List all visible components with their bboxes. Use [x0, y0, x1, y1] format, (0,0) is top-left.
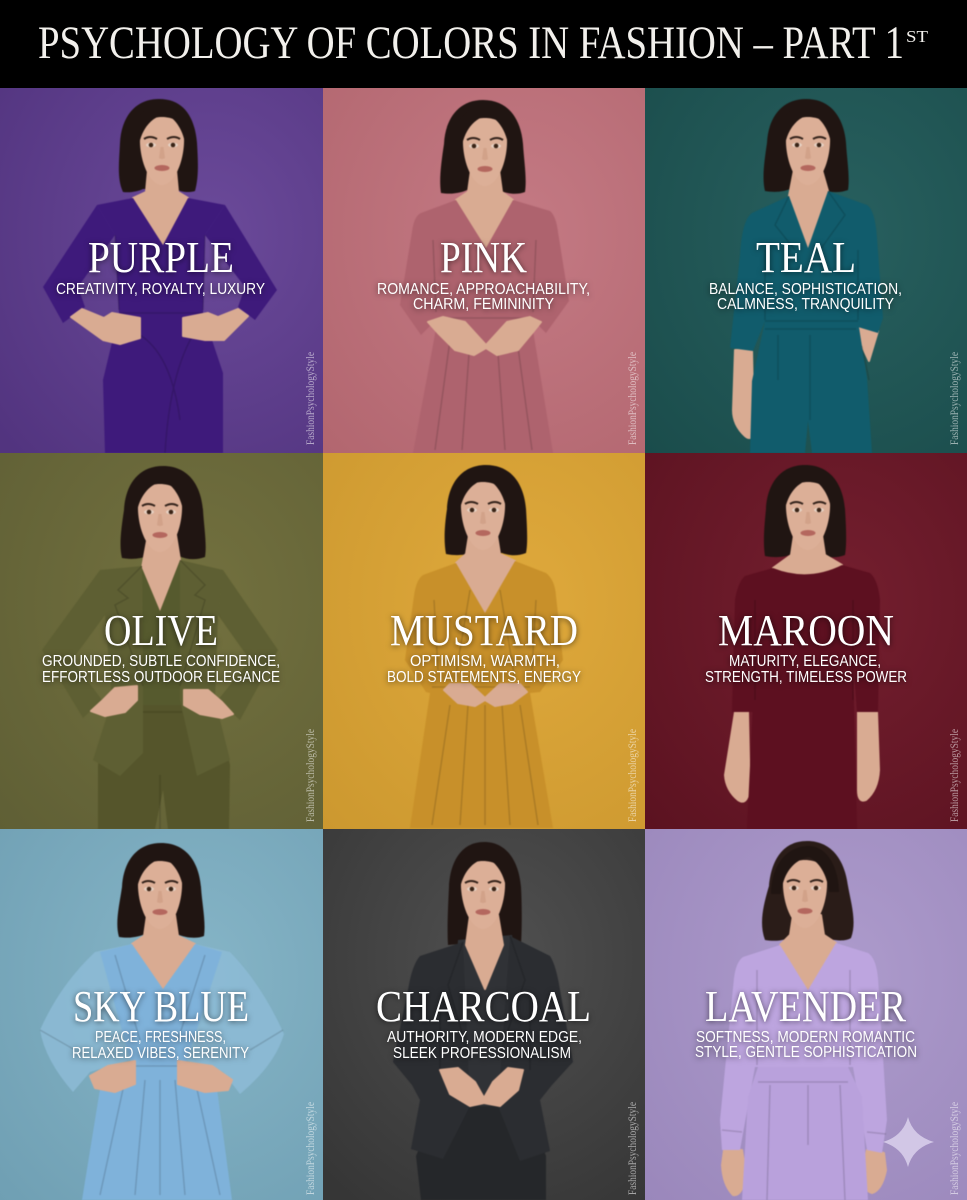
- figure: charcoal suit: [393, 842, 573, 1200]
- figure: purple dress: [43, 99, 277, 453]
- label: pink: ROMANCE, APPROACHABILITY,: [377, 281, 590, 298]
- watermark: FashionPsychologyStyle: [949, 1102, 961, 1195]
- label: sky blue: PEACE, FRESHNESS,: [95, 1029, 226, 1046]
- label: sky blue: [72, 982, 249, 1062]
- label: charcoal: CHARCOAL: [376, 982, 591, 1031]
- label: lavender: SOFTNESS, MODERN ROMANTIC: [696, 1029, 915, 1046]
- figure: lavender blouse and trousers: [720, 841, 887, 1200]
- watermark: FashionPsychologyStyle: [627, 352, 639, 445]
- label: olive: OLIVE: [104, 606, 218, 655]
- figure: sky blue dress: [40, 843, 284, 1200]
- label: sky blue: RELAXED VIBES, SERENITY: [72, 1045, 249, 1062]
- label: mustard: [387, 606, 581, 686]
- panel: pink: [323, 88, 645, 453]
- label: maroon: STRENGTH, TIMELESS POWER: [705, 669, 907, 686]
- watermark: FashionPsychologyStyle: [305, 1102, 317, 1195]
- title superscript: ST: [906, 27, 929, 46]
- label: olive: GROUNDED, SUBTLE CONFIDENCE,: [42, 653, 280, 670]
- panel: olive: [0, 453, 323, 829]
- label: maroon: MAROON: [718, 606, 894, 655]
- panel: lavender: [645, 829, 967, 1200]
- label: olive: EFFORTLESS OUTDOOR ELEGANCE: [42, 669, 280, 686]
- panel: maroon: [645, 453, 967, 829]
- label: mustard: BOLD STATEMENTS, ENERGY: [387, 669, 581, 686]
- watermark: FashionPsychologyStyle: [627, 1102, 639, 1195]
- figure: maroon dress: [725, 465, 880, 829]
- panel: mustard: [323, 453, 645, 829]
- label: olive: [42, 606, 280, 686]
- label: lavender: LAVENDER: [705, 982, 907, 1031]
- watermark: FashionPsychologyStyle: [949, 352, 961, 445]
- panel: charcoal: [323, 829, 645, 1200]
- label: teal: TEAL: [756, 233, 856, 282]
- label: teal: CALMNESS, TRANQUILITY: [717, 296, 894, 313]
- label: pink: [377, 233, 590, 313]
- label: maroon: [705, 606, 907, 686]
- figure: mustard dress: [405, 465, 563, 828]
- title bar: [0, 0, 967, 88]
- label: pink: CHARM, FEMININITY: [413, 296, 554, 313]
- watermark: FashionPsychologyStyle: [305, 729, 317, 822]
- label: teal: BALANCE, SOPHISTICATION,: [709, 281, 902, 298]
- label: mustard: MUSTARD: [390, 606, 578, 655]
- label: charcoal: [376, 982, 591, 1062]
- label: purple: CREATIVITY, ROYALTY, LUXURY: [56, 281, 265, 298]
- label: maroon: MATURITY, ELEGANCE,: [729, 653, 881, 670]
- watermark: FashionPsychologyStyle: [627, 729, 639, 822]
- label: teal: [709, 233, 902, 313]
- panel: teal: [645, 88, 967, 453]
- label: purple: [56, 233, 265, 298]
- panel: purple: [0, 88, 323, 453]
- figure: olive suit: [42, 466, 278, 829]
- watermark: FashionPsychologyStyle: [949, 729, 961, 822]
- label: lavender: STYLE, GENTLE SOPHISTICATION: [695, 1044, 917, 1061]
- label: purple: PURPLE: [88, 233, 234, 282]
- label: pink: PINK: [440, 233, 527, 282]
- panel: sky blue: [0, 829, 323, 1200]
- watermark: FashionPsychologyStyle: [305, 352, 317, 445]
- icon: sparkle: [883, 1117, 934, 1167]
- label: charcoal: AUTHORITY, MODERN EDGE,: [387, 1029, 582, 1046]
- label: sky blue: SKY BLUE: [73, 982, 249, 1031]
- label: mustard: OPTIMISM, WARMTH,: [410, 653, 560, 670]
- figure: teal jumpsuit: [730, 99, 883, 453]
- label: lavender: [695, 982, 917, 1061]
- figure: pink dress: [400, 100, 569, 453]
- label: charcoal: SLEEK PROFESSIONALISM: [393, 1045, 571, 1062]
